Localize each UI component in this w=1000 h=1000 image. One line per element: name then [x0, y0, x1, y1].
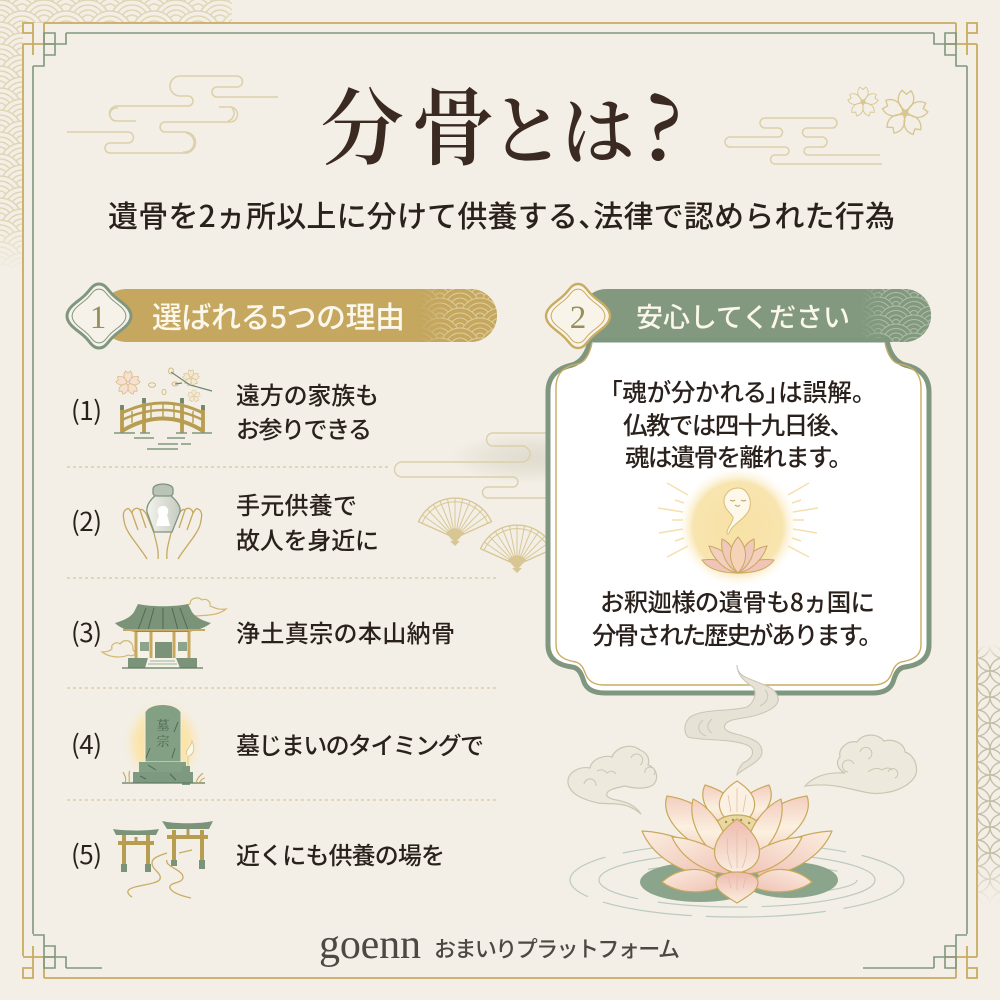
heading: reasons: 1 — [90, 300, 106, 336]
text: item 1: お参りできる — [236, 417, 372, 444]
text: history — [592, 584, 883, 650]
item 2: (2) — [71, 502, 102, 539]
title: ? — [643, 60, 683, 186]
heading: reasons — [67, 284, 500, 348]
item 3 — [71, 598, 455, 668]
item 2 — [71, 484, 379, 559]
icon: soul over lotus — [658, 465, 818, 589]
text: item 1 — [236, 383, 379, 444]
icon: bridge and blossoms — [114, 368, 212, 449]
text: misconception: 魂は遺骨を離れます。 — [625, 444, 853, 472]
footer logo — [319, 922, 680, 968]
text: item 5: 近くにも供養の場を — [236, 843, 445, 870]
subtitle: 遺骨を2ヵ所以上に分けて供養する、法律で認められた行為 — [108, 192, 895, 236]
shippo pattern: right edge — [978, 645, 1000, 905]
decorative mist clouds: center — [395, 432, 610, 498]
item 4: (4) — [71, 725, 102, 762]
item 3: (3) — [71, 613, 102, 650]
item 1: (1) — [71, 391, 102, 428]
card — [548, 340, 929, 693]
smoke — [685, 665, 778, 775]
icon: temple — [102, 598, 226, 668]
seigaiha wave pattern: top-left corner — [0, 0, 232, 268]
item 1 — [71, 368, 379, 449]
title: と — [489, 91, 565, 175]
icon: gravestone — [121, 697, 205, 789]
text: item 2: 故人を身近に — [236, 528, 379, 555]
cloud: left — [568, 746, 657, 814]
title: 分 — [320, 84, 404, 177]
panel: reasons — [67, 284, 500, 898]
heading: reasons: 選ばれる5つの理由 — [152, 293, 405, 337]
footer logo: おまいりプラットフォーム — [434, 937, 680, 962]
text: misconception — [610, 379, 864, 472]
water ripples — [570, 843, 904, 917]
heading: reassurance — [580, 289, 933, 342]
text: misconception: 仏教では四十九日後、 — [623, 412, 854, 440]
cloud: right — [805, 735, 917, 793]
icon: torii gates and path — [113, 821, 213, 898]
text: item 2 — [236, 493, 379, 555]
item 5: (5) — [71, 835, 102, 872]
decorative mist clouds: top right — [725, 118, 882, 164]
lily pads — [640, 862, 838, 902]
icon: folding fans — [418, 498, 554, 573]
text: item 4: 墓じまいのタイミングで — [236, 733, 484, 760]
footer logo: goenn — [319, 922, 421, 968]
badge: 2 — [546, 284, 610, 348]
lotus flower — [642, 781, 832, 903]
title: 骨 — [411, 84, 495, 177]
badge: 2: 2 — [570, 300, 586, 336]
text: item 3: 浄土真宗の本山納骨 — [236, 621, 455, 648]
text: history: お釈迦様の遺骨も8ヵ国に — [600, 584, 875, 619]
decorative mist clouds: top left — [67, 76, 278, 153]
icon: urn held in hands — [123, 484, 202, 559]
text: item 1: 遠方の家族も — [236, 383, 379, 410]
illustration: lotus, smoke and clouds — [568, 665, 917, 917]
icon: gravestone: 墓 — [156, 715, 170, 734]
heading text: reassurance: 安心してください — [636, 303, 850, 333]
item 4 — [71, 697, 484, 789]
item 5 — [71, 821, 445, 898]
text: misconception: 「魂が分かれる」は誤解。 — [610, 379, 864, 407]
icon: gravestone: 宗 — [156, 731, 170, 750]
title: は — [561, 93, 635, 175]
panel: reassurance — [546, 284, 933, 693]
text: history: 分骨された歴史があります。 — [592, 622, 883, 650]
icon: cherry blossoms top right — [847, 87, 930, 137]
text: item 2: 手元供養で — [236, 493, 357, 520]
